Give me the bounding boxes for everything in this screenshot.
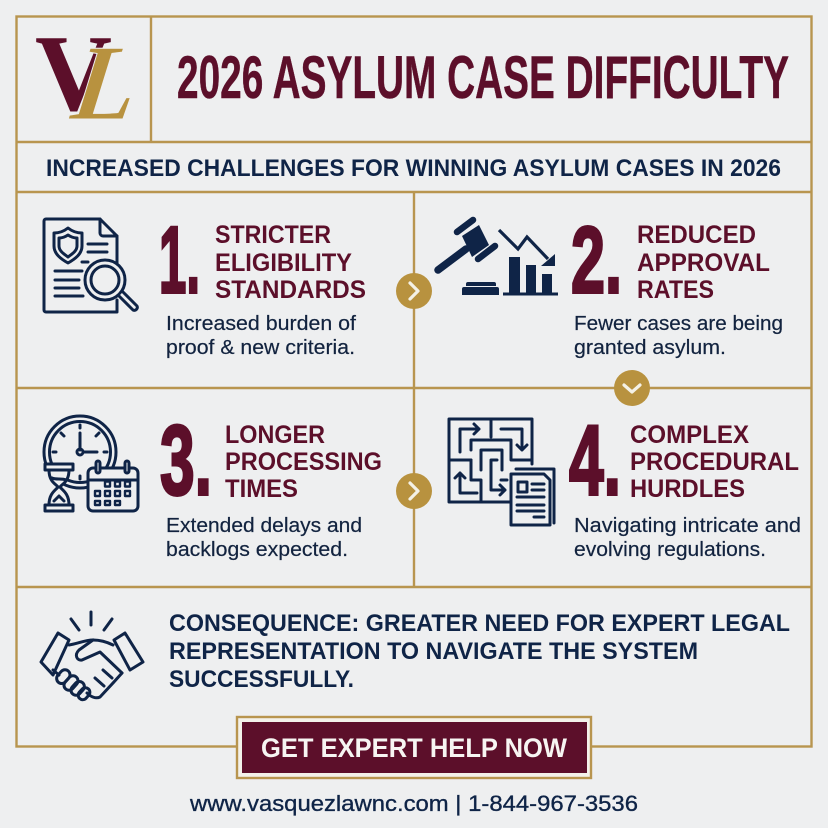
description — [166, 514, 362, 561]
call to action button — [237, 717, 591, 778]
heading: LONGER — [225, 421, 325, 449]
arrow: 1 to 2 — [396, 273, 432, 309]
number 3: 3. — [160, 404, 212, 516]
heading: REDUCED — [637, 221, 756, 249]
number 1: 1. — [159, 208, 200, 314]
description: Fewer cases are being — [574, 312, 783, 335]
description: evolving regulations. — [574, 538, 766, 561]
description: proof & new criteria. — [166, 336, 355, 359]
heading: ELIGIBILITY — [215, 249, 352, 277]
description — [574, 514, 801, 561]
heading — [215, 221, 366, 304]
heading — [225, 421, 382, 503]
description: Navigating intricate and — [574, 514, 801, 537]
panel: longer processing times — [44, 404, 382, 561]
heading: STRICTER — [215, 221, 331, 249]
panel: complex procedural hurdles — [449, 404, 801, 561]
heading: HURDLES — [630, 475, 745, 503]
heading: COMPLEX — [630, 421, 749, 449]
heading: TIMES — [225, 475, 298, 503]
consequence text: CONSEQUENCE: GREATER NEED FOR EXPERT LEGAL — [169, 610, 790, 637]
call to action button: GET EXPERT HELP NOW — [261, 733, 567, 763]
heading: RATES — [637, 276, 714, 304]
heading: STANDARDS — [215, 276, 366, 304]
consequence text: REPRESENTATION TO NAVIGATE THE SYSTEM — [169, 638, 698, 665]
consequence text: SUCCESSFULLY. — [169, 666, 354, 693]
number 4: 4. — [569, 404, 621, 516]
panel: consequence — [41, 610, 790, 702]
heading — [630, 421, 799, 503]
logo — [35, 13, 145, 143]
footer contact line: www.vasquezlawnc.com | 1-844-967-3536 — [189, 791, 638, 816]
subtitle: INCREASED CHALLENGES FOR WINNING ASYLUM CASES IN 2026 — [46, 155, 781, 182]
panel: reduced approval rates — [438, 208, 783, 359]
icon: gavel and falling chart — [438, 220, 558, 296]
description: backlogs expected. — [166, 538, 348, 561]
description — [166, 312, 356, 359]
description — [574, 312, 783, 359]
consequence text — [169, 610, 790, 693]
panel: stricter eligibility standards — [44, 208, 366, 359]
heading: PROCEDURAL — [630, 448, 799, 476]
logo: L — [65, 23, 145, 143]
description: Increased burden of — [166, 312, 356, 335]
number 2: 2. — [571, 208, 622, 314]
icon: handshake — [41, 612, 143, 702]
heading: PROCESSING — [225, 448, 382, 476]
arrow: 3 to 4 — [396, 473, 432, 509]
logo: V — [35, 13, 112, 134]
icon: clock, hourglass and calendar — [44, 416, 138, 511]
description: granted asylum. — [574, 336, 726, 359]
description: Extended delays and — [166, 514, 362, 537]
heading — [637, 221, 770, 304]
arrow: 2 to 4 — [614, 370, 650, 406]
icon: document with shield and magnifier — [44, 219, 137, 312]
heading: APPROVAL — [637, 249, 770, 277]
icon: maze and documents — [449, 419, 554, 525]
